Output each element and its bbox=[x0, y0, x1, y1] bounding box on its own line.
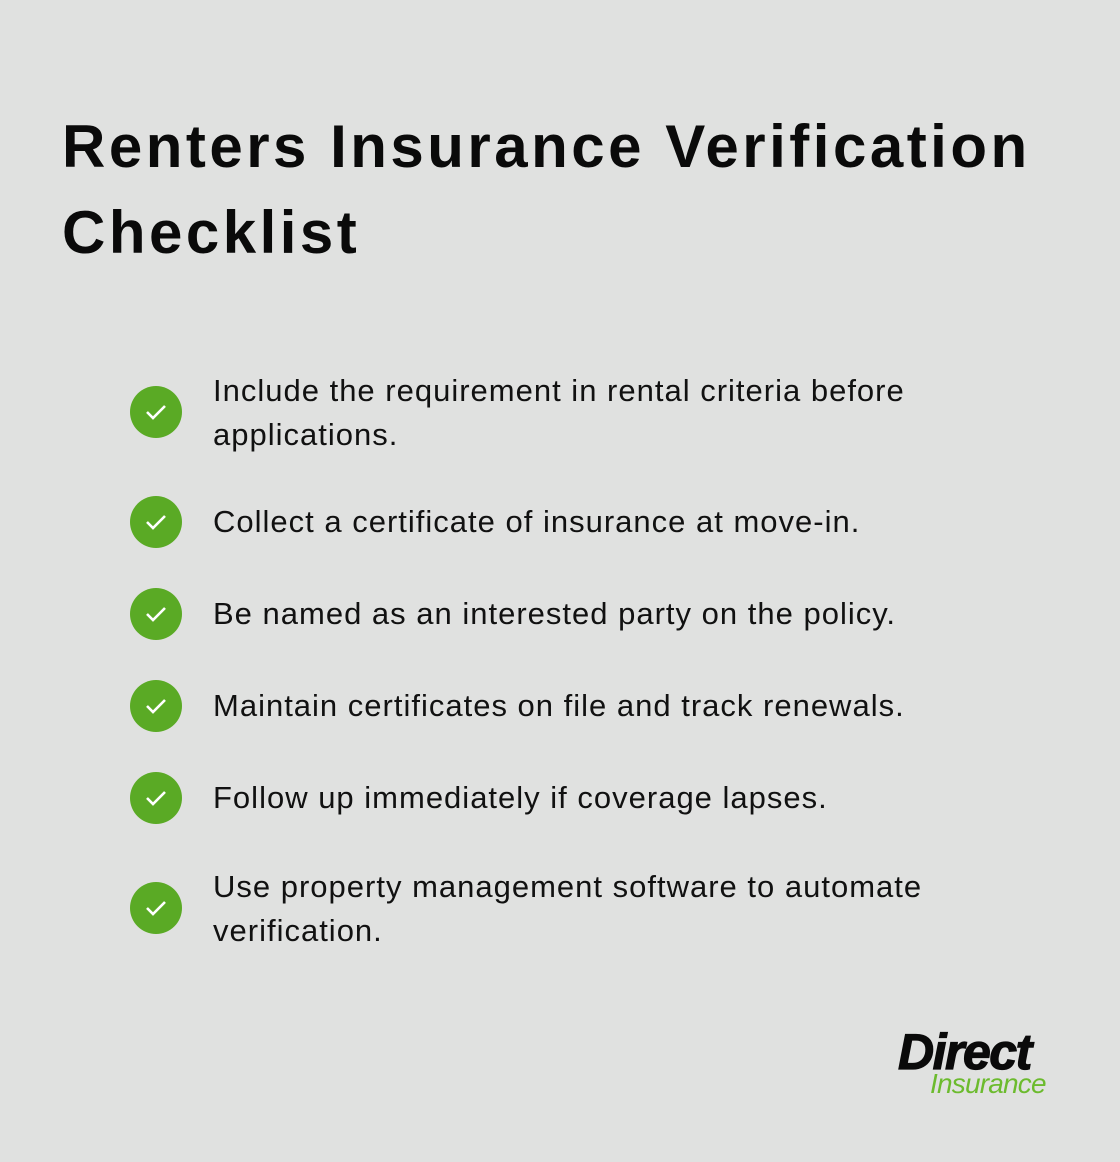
icon: check bbox=[130, 386, 182, 438]
title: Renters Insurance Verification Checklist bbox=[62, 113, 1031, 266]
text: Include the requirement in rental criteria before applications. bbox=[213, 373, 905, 452]
text: Maintain certificates on file and track renewals. bbox=[213, 688, 905, 723]
item 2 bbox=[130, 496, 860, 548]
icon: check bbox=[130, 588, 182, 640]
text: Be named as an interested party on the policy. bbox=[213, 596, 896, 631]
item 6 bbox=[130, 869, 922, 948]
icon: check bbox=[130, 496, 182, 548]
text: Use property management software to automate verification. bbox=[213, 869, 922, 948]
logo: Direct bbox=[898, 1024, 1031, 1080]
text: Collect a certificate of insurance at move-in. bbox=[213, 504, 860, 539]
item 1 bbox=[130, 373, 905, 452]
icon: check bbox=[130, 772, 182, 824]
item 3 bbox=[130, 588, 896, 640]
item 4 bbox=[130, 680, 905, 732]
icon: check bbox=[130, 882, 182, 934]
logo: Insurance bbox=[930, 1068, 1046, 1099]
item 5 bbox=[130, 772, 828, 824]
text: Follow up immediately if coverage lapses. bbox=[213, 780, 828, 815]
logo bbox=[898, 1024, 1046, 1099]
icon: check bbox=[130, 680, 182, 732]
